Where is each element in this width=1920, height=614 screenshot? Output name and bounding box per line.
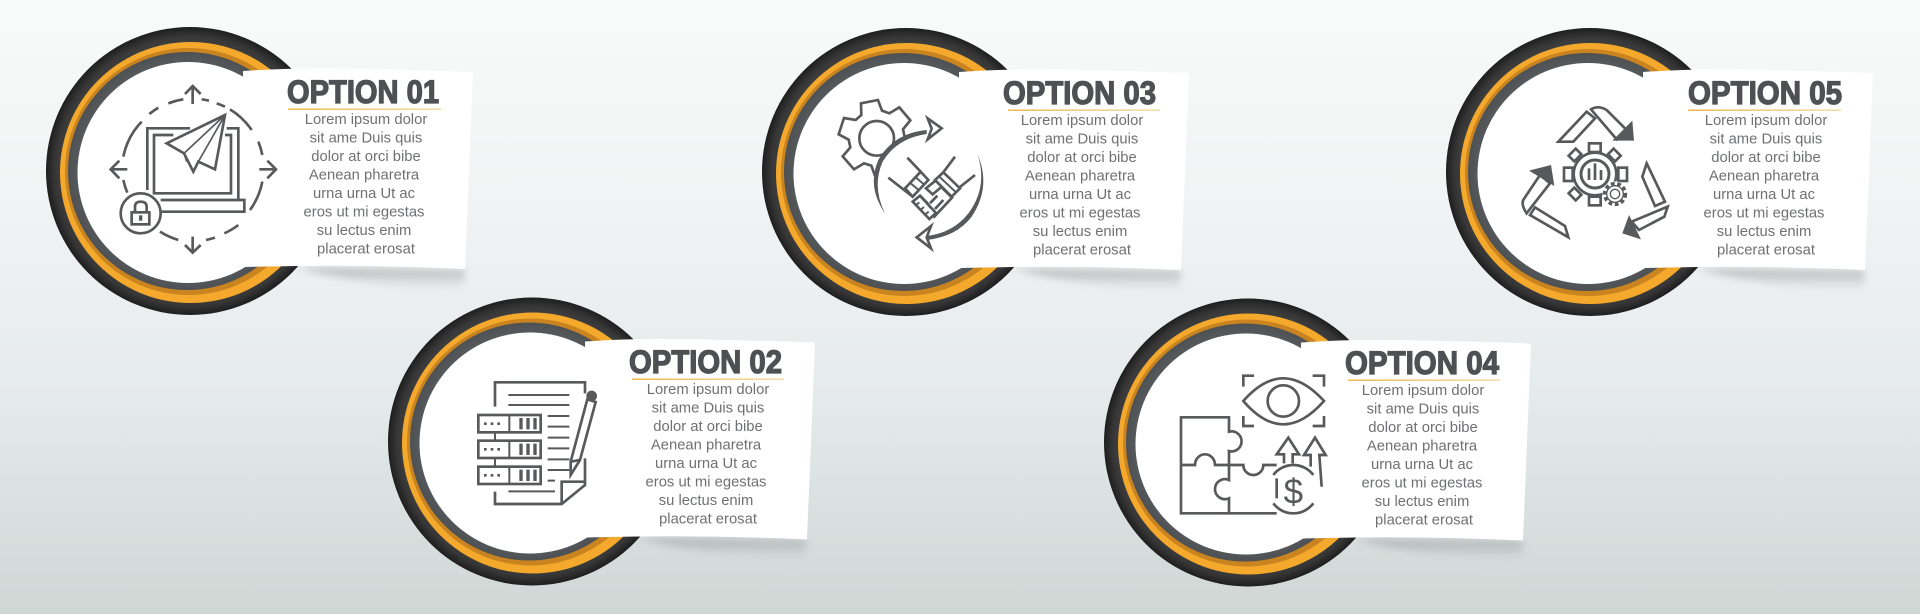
panel: option 03 bbox=[762, 28, 1189, 316]
option 02 body text bbox=[646, 382, 769, 528]
option 02 body text: urna urna Ut ac bbox=[655, 456, 758, 472]
option 05 heading: OPTION 05 bbox=[1688, 75, 1842, 111]
option 01 body text: placerat erosat bbox=[317, 242, 415, 258]
option 02 heading: OPTION 02 bbox=[629, 344, 782, 380]
option 01 body text: sit ame Duis quis bbox=[310, 130, 422, 146]
option 03 body text: eros ut mi egestas bbox=[1020, 206, 1140, 222]
option 01 body text: urna urna Ut ac bbox=[313, 186, 416, 202]
option 05 body text: urna urna Ut ac bbox=[1713, 187, 1816, 203]
option 03 body text bbox=[1020, 113, 1143, 258]
option 01 body text: eros ut mi egestas bbox=[304, 204, 424, 220]
option 02 body text: dolor at orci bibe bbox=[653, 419, 763, 435]
handshake bbox=[888, 157, 975, 219]
option 01 underline bbox=[288, 108, 441, 110]
option 04 body text: sit ame Duis quis bbox=[1367, 402, 1479, 418]
option 04 heading: OPTION 04 bbox=[1345, 345, 1499, 381]
option 04 body text: eros ut mi egestas bbox=[1362, 476, 1482, 492]
option 04 body text bbox=[1362, 383, 1484, 528]
option 05 body text: Lorem ipsum dolor bbox=[1705, 113, 1827, 129]
option 03 underline bbox=[1008, 110, 1160, 111]
icon: recycle arrows around gear bbox=[1523, 107, 1668, 239]
option 01 body text: su lectus enim bbox=[317, 223, 411, 239]
option 04 body text: placerat erosat bbox=[1375, 512, 1473, 528]
icon: paper plane laptop with lock bbox=[111, 86, 276, 253]
option 05 body text: eros ut mi egestas bbox=[1704, 206, 1824, 222]
option 04 body text: Aenean pharetra bbox=[1367, 438, 1478, 454]
panel: option 04 bbox=[1104, 298, 1531, 586]
option 01 body text bbox=[304, 112, 427, 258]
option 05 underline bbox=[1688, 110, 1841, 111]
option 04 underline bbox=[1348, 380, 1500, 381]
option 01 rings and card bbox=[46, 27, 473, 315]
option 02 body text: Aenean pharetra bbox=[651, 438, 762, 454]
option 05 body text: placerat erosat bbox=[1717, 242, 1815, 258]
option 02 body text: su lectus enim bbox=[659, 493, 753, 509]
option 03 body text: su lectus enim bbox=[1033, 224, 1127, 240]
option 02 body text: sit ame Duis quis bbox=[652, 400, 764, 416]
option 02 underline bbox=[632, 378, 784, 380]
option 03 body text: urna urna Ut ac bbox=[1029, 187, 1132, 203]
option 03 heading: OPTION 03 bbox=[1003, 75, 1156, 111]
option 04 body text: Lorem ipsum dolor bbox=[1362, 383, 1484, 399]
option 01 body text: Aenean pharetra bbox=[309, 168, 420, 184]
panel: option 05 bbox=[1446, 28, 1873, 316]
option 04 body text: dolor at orci bibe bbox=[1368, 420, 1478, 436]
option 02 rings and card bbox=[388, 298, 815, 586]
option 02 body text: placerat erosat bbox=[659, 512, 757, 528]
option 01 body text: Lorem ipsum dolor bbox=[305, 112, 427, 128]
option 05 body text: sit ame Duis quis bbox=[1710, 132, 1822, 148]
option 03 body text: dolor at orci bibe bbox=[1027, 150, 1137, 166]
option 03 body text: Aenean pharetra bbox=[1025, 168, 1136, 184]
option 05 body text: Aenean pharetra bbox=[1709, 168, 1820, 184]
option 03 body text: placerat erosat bbox=[1033, 242, 1131, 258]
option 04 body text: urna urna Ut ac bbox=[1371, 457, 1474, 473]
option 03 body text: Lorem ipsum dolor bbox=[1021, 113, 1143, 129]
option 03 body text: sit ame Duis quis bbox=[1026, 132, 1138, 148]
option 05 rings and card bbox=[1446, 28, 1873, 316]
option 01 heading: OPTION 01 bbox=[287, 74, 439, 110]
option 05 body text: dolor at orci bibe bbox=[1711, 150, 1821, 166]
panel: option 02 bbox=[388, 298, 815, 586]
option 05 body text bbox=[1704, 113, 1827, 258]
option 03 rings and card bbox=[762, 28, 1189, 316]
option 04 body text: su lectus enim bbox=[1375, 494, 1469, 510]
panel: option 01 bbox=[46, 27, 473, 315]
icon: document with servers and pencil bbox=[478, 382, 597, 504]
option 04 rings and card bbox=[1104, 298, 1531, 586]
option 05 body text: su lectus enim bbox=[1717, 224, 1811, 240]
option 02 body text: eros ut mi egestas bbox=[646, 474, 766, 490]
icon: eye, puzzle and dollar bbox=[1181, 376, 1326, 513]
icon: gear and handshake with arrows bbox=[839, 100, 985, 248]
icon: eye, puzzle and dollar: $ bbox=[1284, 472, 1303, 511]
option 02 body text: Lorem ipsum dolor bbox=[647, 382, 769, 398]
option 01 body text: dolor at orci bibe bbox=[311, 149, 421, 165]
gear and circular arrows bbox=[839, 100, 985, 248]
